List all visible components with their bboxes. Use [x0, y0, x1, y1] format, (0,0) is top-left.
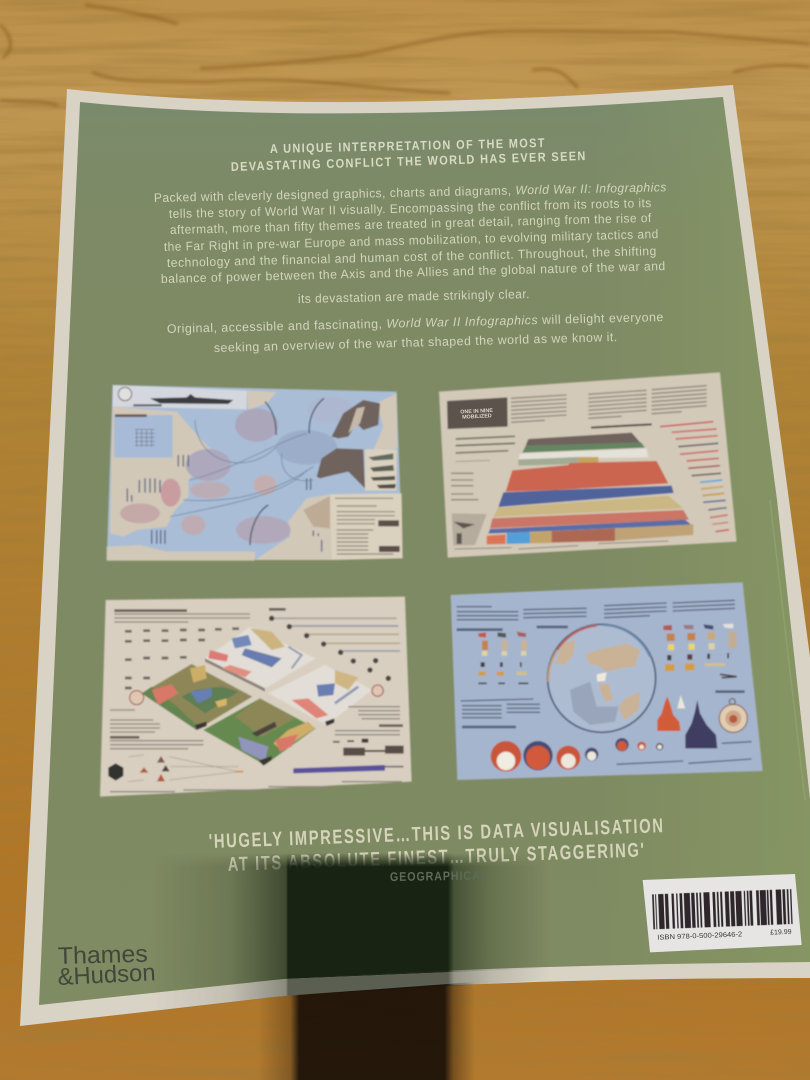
quote: AT ITS ABSOLUTE FINEST…TRULY STAGGERING' [227, 839, 646, 876]
title box background [447, 397, 508, 429]
title box text: ONE IN NINE [460, 408, 493, 416]
body paragraph: Packed with cleverly designed graphics, charts and diagrams, World War II: Infographics [154, 180, 667, 205]
quote: 'HUGELY IMPRESSIVE…THIS IS DATA VISUALISATION [208, 815, 665, 853]
hand shadow across book and table [180, 854, 540, 1080]
inset diagram [114, 414, 173, 458]
publisher logo: &Hudson [57, 959, 156, 991]
barcode label [643, 874, 802, 952]
price: £19.99 [770, 929, 792, 937]
total line [591, 424, 652, 428]
section headers [110, 608, 403, 739]
footnotes [454, 541, 668, 549]
card: isometric airfields [100, 597, 412, 797]
ISBN: ISBN 978-0-500-29646-2 [657, 931, 742, 942]
convoy charts [127, 455, 322, 552]
red tower ship [657, 697, 681, 731]
isometric plate: top [205, 627, 316, 692]
map land masses [107, 391, 397, 561]
battleship [685, 700, 717, 748]
range bars bottom right [293, 739, 404, 773]
timeline dots [269, 616, 391, 681]
inset panel [452, 513, 487, 546]
network triangles [128, 755, 243, 782]
continents [555, 640, 575, 665]
isometric plate: bottom [203, 698, 316, 766]
quote [208, 815, 665, 876]
isometric plate: left [142, 664, 252, 730]
section header bars [457, 626, 745, 728]
closing paragraph [167, 310, 664, 355]
body paragraph: its devastation are made strikingly clear. [298, 287, 530, 306]
publisher logo: Thames [57, 941, 148, 970]
right bar lists [660, 422, 729, 532]
quote source: GEOGRAPHICAL [390, 869, 488, 884]
right flags and icon columns [663, 624, 737, 678]
stopwatch [719, 699, 747, 732]
title box text line two: MOBILIZED [462, 413, 492, 421]
Africa shaded region [303, 496, 330, 528]
text columns [511, 386, 707, 422]
text columns [457, 600, 752, 764]
body paragraph: aftermath, more than fifty themes are treated in great detail, ranging from the rise of [170, 211, 652, 237]
pyramid of figures [487, 433, 693, 544]
occupied Europe [317, 448, 365, 488]
Scandinavia [332, 400, 380, 438]
body paragraph: technology and the financial and human cost of the conflict. Throughout, the shifting [167, 244, 657, 270]
text panel [330, 493, 403, 560]
timeline bars top right [273, 618, 400, 651]
card: One in Nine Mobilized [439, 372, 737, 558]
dark range arcs [250, 398, 324, 545]
card: North Atlantic map [107, 385, 403, 561]
heading [231, 136, 587, 174]
publisher logo [57, 941, 156, 991]
barcode bars [652, 889, 793, 929]
closing paragraph: seeking an overview of the war that shaped the world as we know it. [214, 330, 618, 355]
card: naval blue infographic [451, 582, 763, 780]
body paragraph: tells the story of World War II visually. Encompassing the conflict from its roots to its [169, 196, 652, 221]
hexagon badge [108, 763, 123, 781]
top strip with U-boat [113, 385, 247, 409]
closing paragraph: Original, accessible and fascinating, World War II Infographics will delight everyone [167, 310, 664, 336]
body paragraph: the Far Right in pre-war Europe and mass mobilization, to evolving military tactics and [164, 227, 659, 254]
aircraft panel [365, 449, 397, 491]
polar globe [548, 624, 656, 732]
map shaded zones [120, 397, 353, 544]
aircraft icon rows [125, 627, 239, 689]
text blocks [110, 614, 402, 792]
red target left [130, 691, 144, 705]
white mushroom shape [677, 695, 685, 708]
heading: A UNIQUE INTERPRETATION OF THE MOST [270, 136, 546, 156]
bubble charts [491, 738, 663, 772]
body paragraph [154, 180, 667, 306]
stippled ocean area [570, 682, 618, 725]
left flags and icon columns [478, 632, 528, 683]
left bar lists [451, 436, 515, 500]
convoy routes and arcs [170, 420, 313, 517]
heading: DEVASTATING CONFLICT THE WORLD HAS EVER SEEN [231, 149, 587, 174]
isometric plate: right [268, 665, 383, 726]
body paragraph: balance of power between the Axis and the Allies and the global nature of the war and [161, 259, 666, 286]
